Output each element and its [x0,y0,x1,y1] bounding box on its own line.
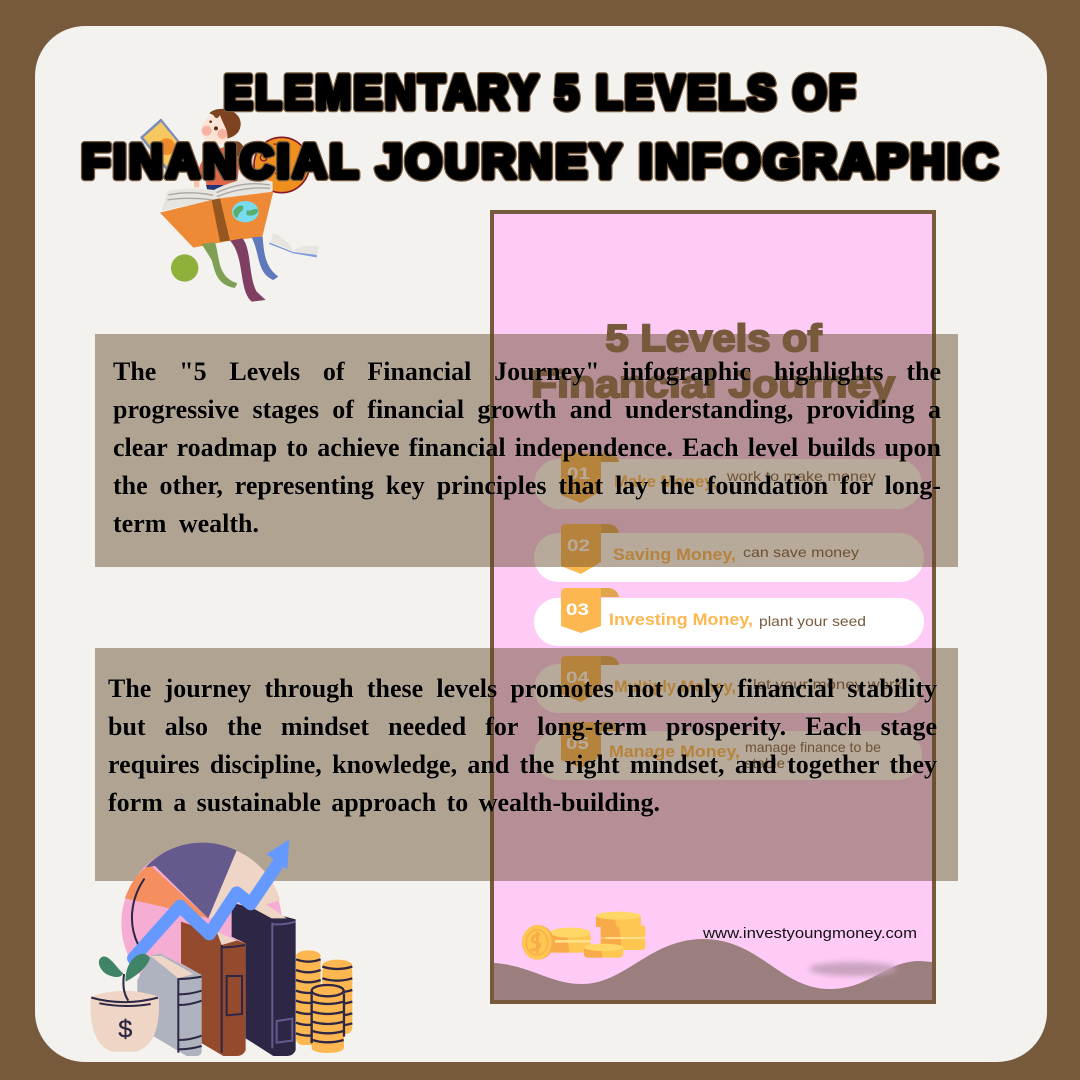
title: FINANCIAL JOURNEY INFOGRAPHIC [82,134,1000,188]
level 4 pill: Multiply Money, [614,678,736,696]
level 4 pill: let your money work [753,676,904,692]
level 2 pill [534,524,924,582]
icon: gold coins [522,912,645,960]
level 3 pill: plant your seed [759,613,866,629]
title: ELEMENTARY 5 LEVELS OF [224,66,858,118]
journey paragraph: form a sustainable approach to wealth-building. [108,788,660,817]
website url: www.investyoungmoney.com [702,925,917,942]
intro paragraph: progressive stages of financial growth and understanding, providing a [113,395,941,424]
poster heading second line: Financial Journey [531,364,895,406]
icon: finance books, growth arrow, coins and plant [90,839,352,1056]
level 1 pill: work to make money [726,468,876,484]
level 3 pill: Investing Money, [609,611,753,629]
book held by girl [140,118,183,172]
panel: introduction text box [95,334,958,567]
level 5 pill [534,722,922,780]
level 1 pill: Make Money, [614,473,717,491]
journey paragraph: The journey through these levels promotes not only financial stability [108,674,937,703]
level 5 pill: manage finance to be [745,739,881,755]
journey paragraph: but also the mindset needed for long-term prosperity. Each stage [108,712,937,741]
purple ribbon [230,238,266,302]
level 3 pill: 03 [566,600,589,619]
intro paragraph: clear roadmap to achieve financial independence. Each level builds upon [113,433,941,462]
title: ELEMENTARY 5 LEVELS OF [224,66,858,118]
open orange book [160,178,273,248]
plant pot [90,954,159,1052]
icon: girl reading on an open book [140,109,319,302]
title: FINANCIAL JOURNEY INFOGRAPHIC [82,134,1000,188]
pie chart [121,843,282,1004]
journey paragraph [108,674,937,817]
panel: journey text box [95,648,958,881]
level 1 pill [534,453,922,509]
panel: embedded pink poster [492,212,934,1002]
poster frame [492,212,934,1002]
poster hills [494,939,932,1000]
level 1 pill: 01 [567,464,590,483]
level 2 pill: can save money [743,544,859,560]
level 4 pill [534,656,922,713]
level 5 pill: stable [745,755,785,771]
green ribbon [202,242,237,288]
blue ribbon [252,237,278,280]
small open book [269,233,319,257]
level 2 pill: Saving Money, [613,546,736,564]
plant pot: $ [118,1015,132,1043]
girl [194,109,245,194]
level 5 pill: Manage Money, [609,743,740,761]
intro paragraph: term wealth. [113,509,259,538]
intro paragraph: the other, representing key principles that lay the foundation for long- [113,471,941,500]
poster heading first line: 5 Levels of [606,318,822,360]
intro paragraph [113,357,941,538]
intro paragraph: The "5 Levels of Financial Journey" infographic highlights the [113,357,941,386]
coin stacks [296,950,352,1053]
hill shadow [809,962,897,976]
dark book [232,900,296,1056]
level 4 pill: 04 [566,668,590,687]
title [82,66,1000,188]
growth arrow [133,839,289,958]
level 3 pill [534,588,924,646]
level 2 pill: 02 [567,536,590,555]
brown book [181,922,246,1056]
green ball [171,254,198,282]
orange globe behind girl [254,137,309,193]
gray book [137,953,202,1056]
journey paragraph: requires discipline, knowledge, and the right mindset, and together they [108,750,937,779]
level 5 pill: 05 [566,734,589,753]
